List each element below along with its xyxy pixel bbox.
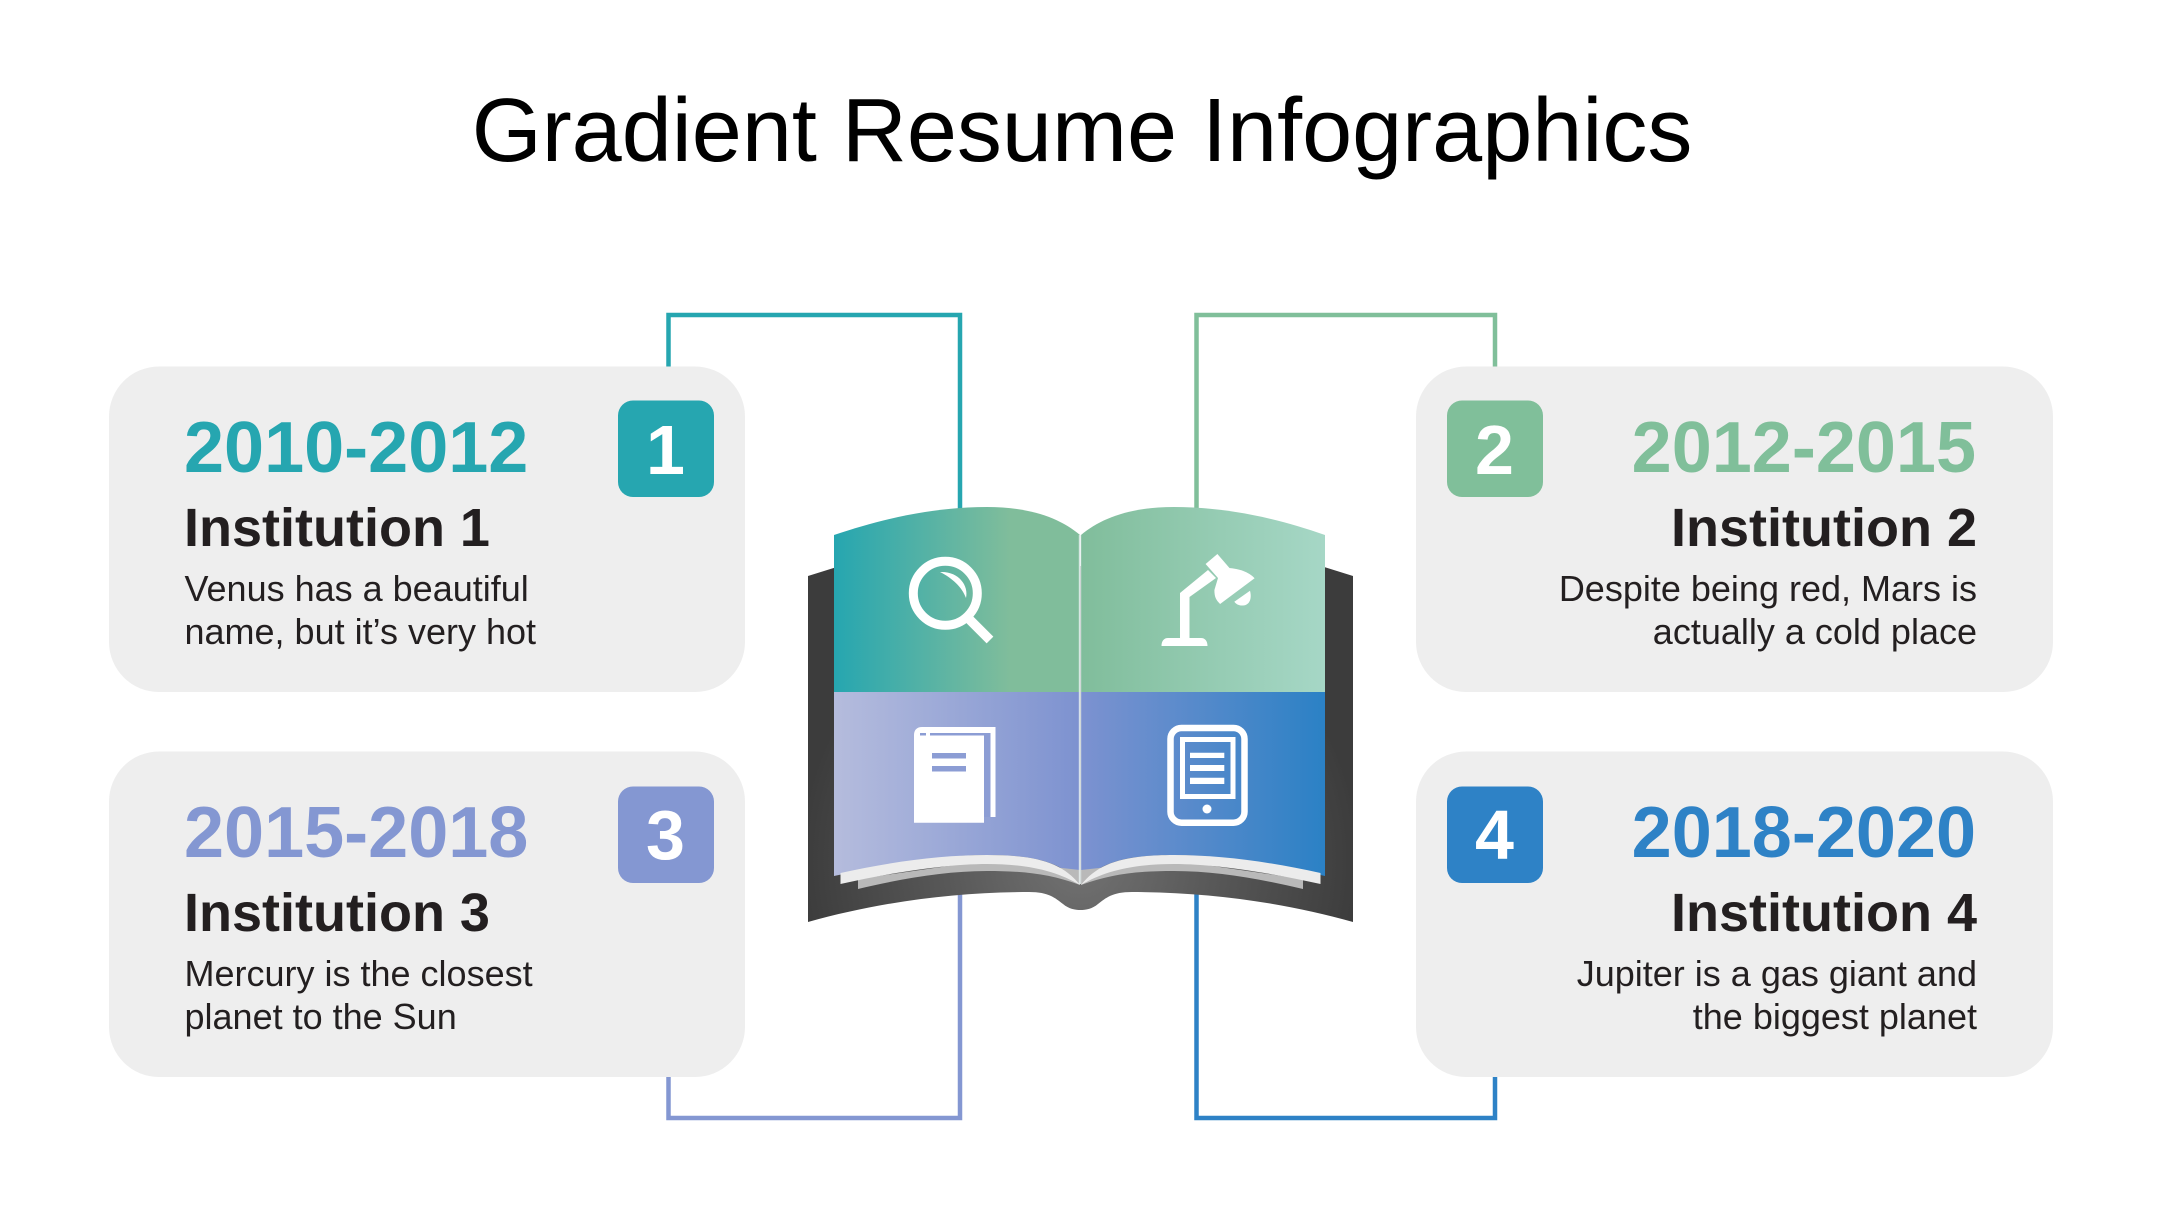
title: Gradient Resume Infographics: [472, 81, 1692, 181]
description 3: planet to the Sun: [184, 996, 457, 1037]
description 1: Venus has a beautiful: [184, 568, 529, 609]
paper edges left: [840, 855, 1080, 889]
open book illustration: [808, 507, 1353, 922]
institution 1: Institution 1: [184, 498, 490, 558]
description 4: the biggest planet: [1693, 996, 1977, 1037]
connector: blue line from card 4 to book: [1196, 880, 1495, 1118]
panel: card 2: [1416, 366, 2053, 692]
book spine line: [1079, 535, 1081, 884]
badge 4: [1447, 786, 1543, 883]
badge 3: 3: [646, 796, 685, 874]
description 3: Mercury is the closest: [184, 953, 533, 994]
connector: green line from card 2 to book: [1196, 315, 1495, 520]
date 2: 2012-2015: [1632, 408, 1976, 488]
panel: card 4: [1416, 752, 2053, 1077]
icon: desk lamp: [1162, 554, 1255, 646]
badge 4: 4: [1475, 796, 1514, 874]
connector: periwinkle line from card 3 to book: [668, 880, 960, 1118]
date 1: 2010-2012: [184, 408, 528, 488]
page: bottom left: [834, 692, 1080, 884]
page: top right: [1081, 507, 1325, 692]
panel: card 1: [109, 366, 745, 692]
book cover: [808, 566, 1353, 922]
date 3: 2015-2018: [184, 793, 528, 873]
institution 3: Institution 3: [184, 883, 490, 943]
connector: teal line from card 1 to book: [668, 315, 960, 520]
page: bottom right: [1081, 692, 1325, 884]
panel: card 3: [109, 752, 745, 1077]
badge 1: [618, 400, 714, 497]
date 4: 2018-2020: [1632, 793, 1976, 873]
institution 2: Institution 2: [1671, 498, 1977, 558]
badge 3: [618, 786, 714, 883]
badge 2: 2: [1475, 411, 1514, 489]
description 1: name, but it’s very hot: [184, 611, 536, 652]
description 4: Jupiter is a gas giant and: [1577, 953, 1977, 994]
description 2: Despite being red, Mars is: [1559, 568, 1977, 609]
description 2: actually a cold place: [1653, 611, 1977, 652]
badge 1: 1: [646, 411, 685, 489]
icon: magnifying glass: [913, 561, 990, 640]
institution 4: Institution 4: [1671, 883, 1977, 943]
paper edges right: [1081, 855, 1320, 889]
page: top left: [834, 507, 1080, 692]
badge 2: [1447, 400, 1543, 497]
icon: tablet: [1170, 728, 1244, 823]
icon: document: [914, 727, 996, 823]
